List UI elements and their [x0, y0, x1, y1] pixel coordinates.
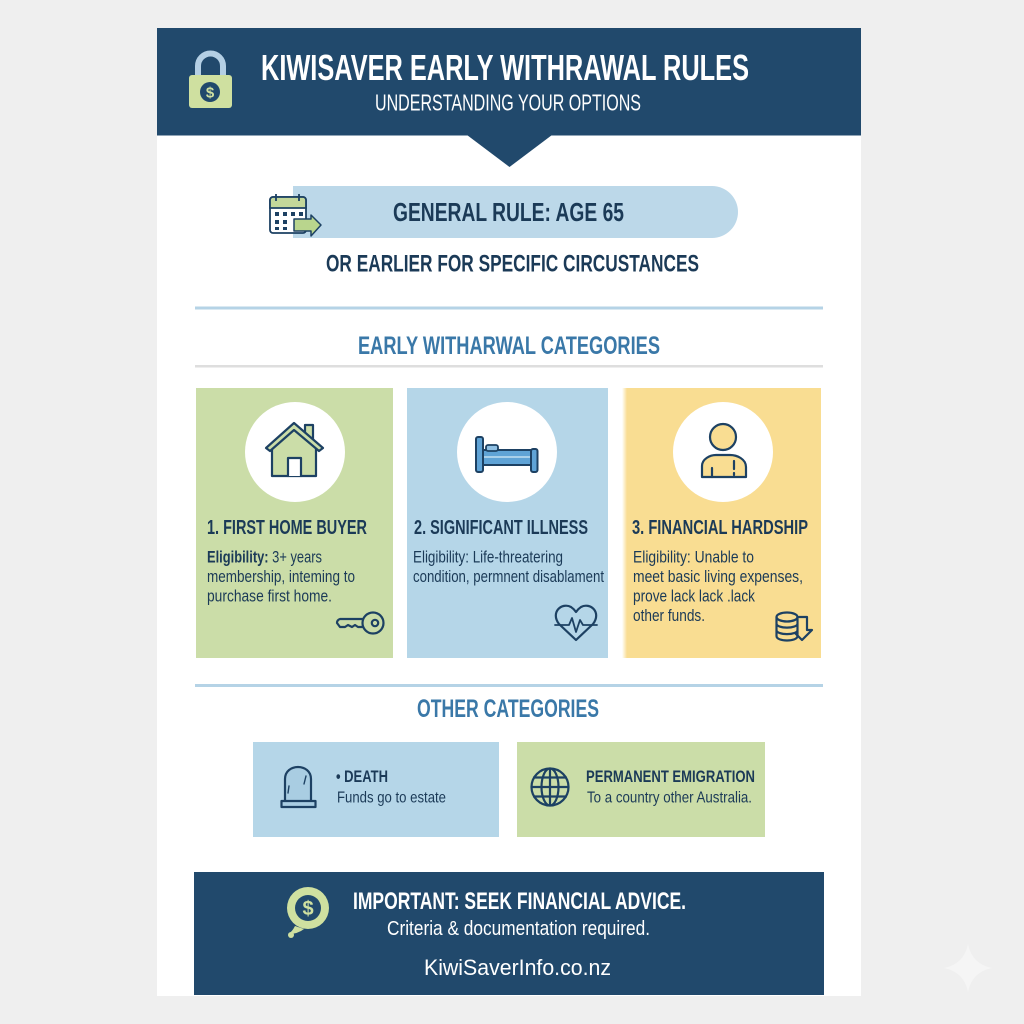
panel: death: Funds go to estate: [337, 790, 446, 806]
death text: • DEATH: [336, 767, 388, 786]
icon: person: [702, 424, 746, 477]
general rule pill: [270, 186, 738, 238]
icon: key: [337, 612, 384, 634]
heading: 2. SIGNIFICANT ILLNESS: [414, 517, 588, 539]
icon: padlock with dollar: $: [206, 84, 215, 102]
heading: 3. FINANCIAL HARDSHIP: [632, 517, 808, 539]
icon: padlock with dollar: [189, 53, 232, 108]
icon: speech bubble with dollar: $: [302, 898, 314, 920]
panel: financial hardship: [622, 388, 821, 658]
panel: permanent emigration: To a country other Australia.: [587, 790, 752, 806]
body text: meet basic living expenses,: [633, 567, 803, 586]
body text: condition, permnent disablament: [413, 567, 604, 586]
icon: house: [266, 423, 323, 476]
criteria text: Criteria & documentation required.: [387, 918, 650, 940]
icon: speech bubble with dollar: [287, 887, 329, 938]
section heading: early withdrawal: EARLY WITHARWAL CATEGORIES: [358, 332, 660, 360]
rule subtext: OR EARLIER FOR SPECIFIC CIRCUSTANCES: [326, 250, 699, 278]
panel: permanent emigration: [517, 742, 765, 837]
icon: bed: [476, 437, 538, 472]
body text: [413, 548, 604, 586]
heading: 1. FIRST HOME BUYER: [207, 517, 367, 539]
icon: calendar with arrow: [270, 194, 321, 236]
panel: first home buyer: [196, 388, 393, 658]
icon: coins with down arrow: [776, 612, 812, 640]
body text: Eligibility: Unable to: [633, 548, 754, 566]
section heading: other categories: OTHER CATEGORIES: [417, 695, 599, 723]
panel: death: [253, 742, 499, 837]
emigration text: PERMANENT EMIGRATION: [586, 767, 755, 786]
website: KiwiSaverInfo.co.nz: [424, 955, 611, 980]
footer banner: [194, 872, 824, 995]
body text: [633, 548, 803, 625]
watermark sparkle: [944, 944, 992, 992]
header banner: [157, 28, 861, 167]
icon: heart with pulse: [555, 606, 597, 640]
body text: Eligibility: 3+ years: [207, 548, 322, 566]
body text: [207, 548, 355, 606]
icon: headstone: [282, 767, 316, 807]
body text: purchase first home.: [207, 586, 332, 606]
title: KIWISAVER EARLY WITHRAWAL RULES: [261, 47, 749, 88]
body text: other funds.: [633, 606, 705, 625]
body text: membership, inteming to: [207, 567, 355, 586]
subtitle: UNDERSTANDING YOUR OPTIONS: [375, 90, 641, 116]
white page panel: [157, 28, 861, 996]
general rule text: GENERAL RULE: AGE 65: [393, 197, 624, 227]
body text: Eligibility: Life-threatering: [413, 548, 563, 566]
important text: IMPORTANT: SEEK FINANCIAL ADVICE.: [353, 888, 686, 915]
body text: prove lack lack .lack: [633, 586, 755, 606]
panel: significant illness: [407, 388, 608, 658]
icon: globe: [532, 768, 568, 806]
